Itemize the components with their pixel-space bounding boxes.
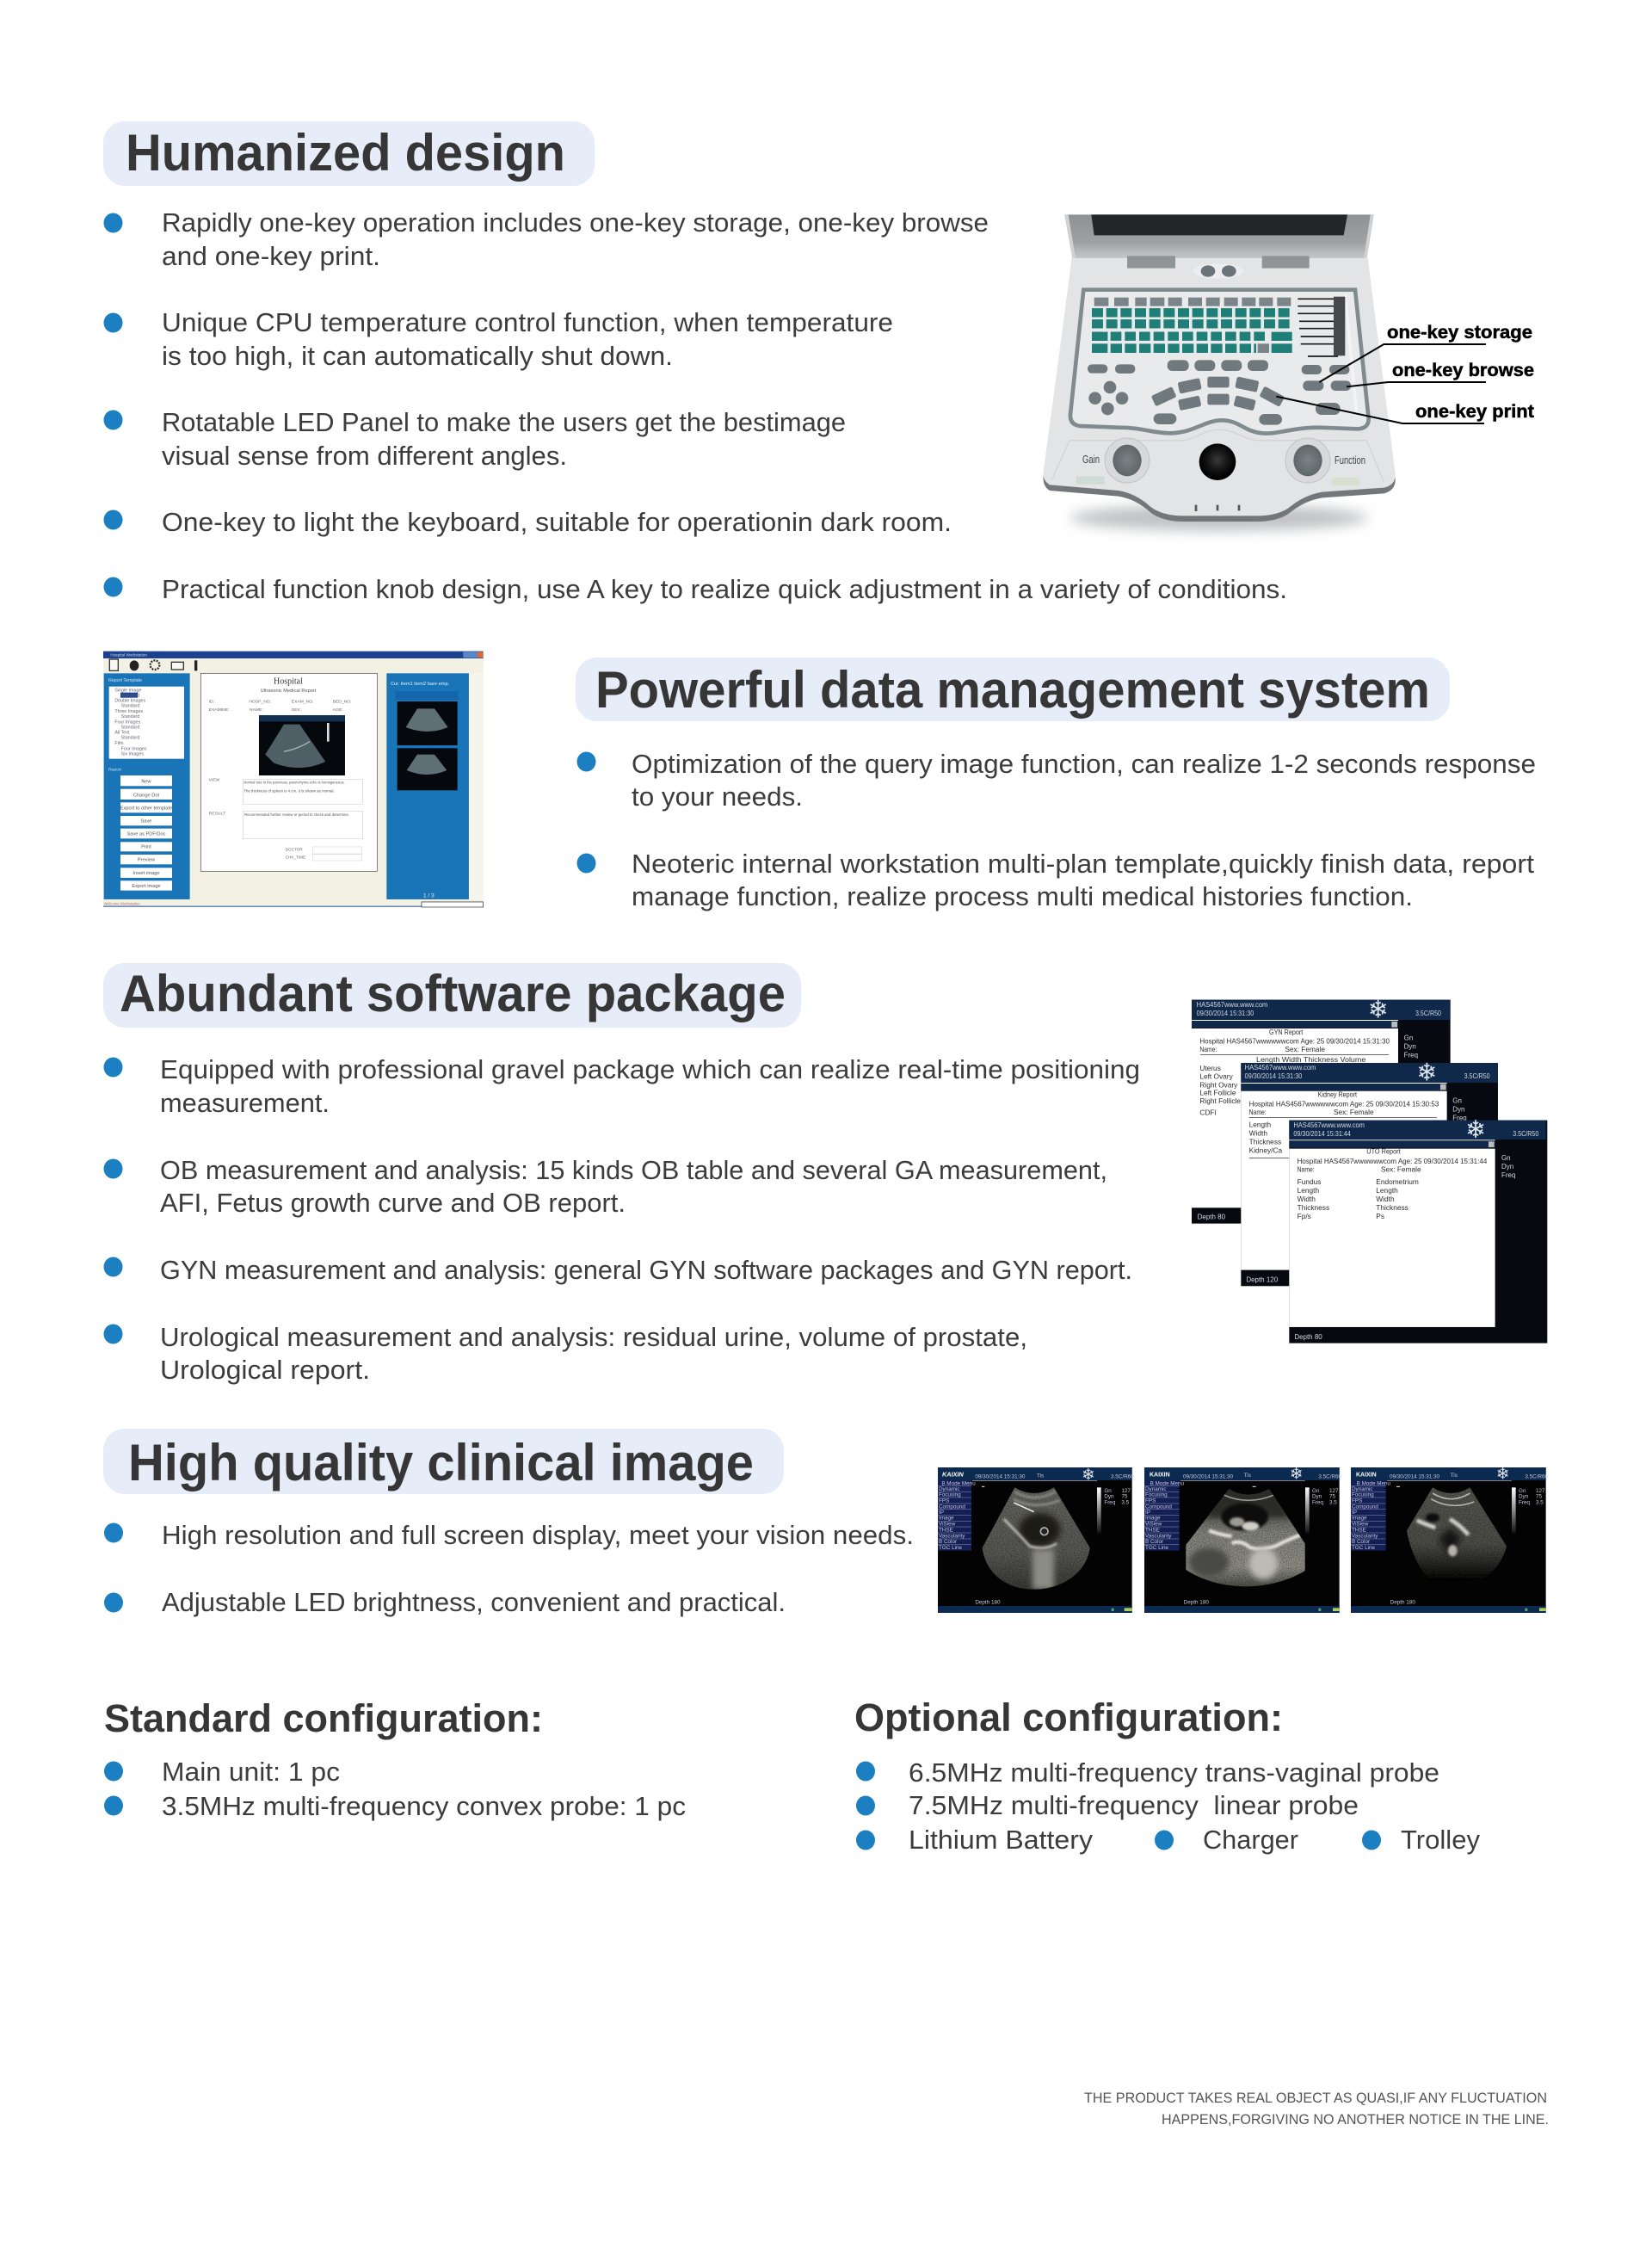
ultrasound image 2: Dynamic <box>1145 1486 1167 1492</box>
screen: GYN report: Name: <box>1199 1045 1217 1053</box>
screen: UTO report <box>1289 1116 1547 1343</box>
ultrasound image 3: ViSiew <box>1352 1522 1369 1528</box>
ultrasound image 3: Dyn <box>1519 1494 1529 1500</box>
software screenshot: report workstation: The thickness of spleen is 4 cm. It is shown as normal. <box>243 789 335 794</box>
software screenshot: report workstation: Ultrasonic Medical Report <box>261 689 317 694</box>
software screenshot: report workstation: Film <box>114 741 124 746</box>
footer disclaimer: HAPPENS,FORGIVING NO ANOTHER NOTICE IN THE LINE. <box>1162 2111 1549 2128</box>
bullet list: software packages: GYN measurement and analysis: general GYN software packages and GYN report. <box>160 1255 1132 1285</box>
software screenshot: report workstation: Hospital Workstation <box>110 652 147 657</box>
footer disclaimer <box>1084 2090 1549 2128</box>
ultrasound image 2: 09/30/2014 15:31:30 <box>1183 1473 1234 1479</box>
software screenshot: report workstation: Four Images <box>121 746 147 751</box>
ultrasound image 2: B Color <box>1145 1539 1163 1545</box>
ultrasound image 2: 3.5 <box>1329 1499 1337 1505</box>
section: Abundant software package <box>103 963 1547 1385</box>
ultrasound image 1: Image <box>939 1516 954 1522</box>
screen: GYN report: Left Follicle <box>1199 1089 1236 1097</box>
ultrasound image 3: IP <box>1352 1510 1357 1516</box>
ultrasound image 2: IP <box>1145 1510 1150 1516</box>
ultrasound image 1: Dyn <box>1104 1494 1114 1500</box>
ultrasound image 1: THSE <box>939 1527 953 1533</box>
software screenshot: report workstation: Standard <box>121 736 139 741</box>
screen: kidney report: Width <box>1249 1128 1267 1137</box>
ultrasound image 2: Vascularity <box>1145 1533 1172 1539</box>
bullet list: data management features: to your needs. <box>632 781 803 812</box>
software screenshot: report workstation: EXAMINE: <box>209 707 229 713</box>
screen: UTO report: Dyn <box>1501 1163 1513 1170</box>
software screenshot: report workstation: Save as PDF/Doc <box>127 832 166 837</box>
software screenshot: report workstation: ID: <box>209 700 214 705</box>
bullet list: humanized features: Practical function knob design, use A key to realize quick adjustment in a variety of conditions. <box>162 574 1287 604</box>
software screenshot: report workstation: NAME: <box>250 707 263 713</box>
bullet list: standard items: Main unit: 1 pc <box>162 1757 340 1787</box>
screen: kidney report: Dyn <box>1452 1105 1465 1113</box>
ultrasound image 3: 3.5 <box>1536 1499 1544 1505</box>
screen: GYN report: Depth 80 <box>1198 1214 1226 1221</box>
callout: one-key print: one-key print <box>1415 402 1534 422</box>
ultrasound image 2: Gn <box>1312 1488 1320 1494</box>
screen: UTO report: Thickness <box>1376 1203 1409 1212</box>
bullet list: image features: High resolution and full screen display, meet your vision needs. <box>162 1520 914 1550</box>
section: Standard configuration <box>104 1696 686 1821</box>
ultrasound image 2: 3.5C/R60 <box>1318 1473 1342 1479</box>
bullet list: humanized features: visual sense from different angles. <box>162 441 567 471</box>
software screenshot: report workstation: Export image <box>132 884 161 889</box>
software screenshot: report workstation: Normal size in the pancreas, parenchyma echo is homogeneous. <box>243 781 345 786</box>
ultrasound image 3: TGC Line <box>1352 1545 1376 1551</box>
screen: UTO report: Endometrium <box>1376 1177 1419 1186</box>
bullet list: optional items: 6.5MHz multi-frequency trans-vaginal probe <box>909 1757 1439 1788</box>
screen: UTO report: Depth 80 <box>1294 1333 1322 1341</box>
screen: kidney report: Gn <box>1452 1096 1462 1104</box>
stacked report screens <box>1192 996 1547 1343</box>
screen: GYN report: GYN Report <box>1269 1028 1304 1036</box>
ultrasound image 1: TGC Line <box>939 1545 963 1551</box>
screen: kidney report: 3.5C/R50 <box>1464 1072 1490 1080</box>
screen: GYN report: Right Ovary <box>1199 1080 1238 1089</box>
ultrasound image 1: B Color <box>939 1539 957 1545</box>
screen: UTO report: 09/30/2014 15:31:44 <box>1293 1130 1351 1138</box>
ultrasound image 2: ViSiew <box>1145 1522 1162 1528</box>
heading pill: Humanized design: Humanized design <box>126 124 565 182</box>
software screenshot: report workstation: Save <box>141 819 151 825</box>
screen: GYN report: Sex: Female <box>1285 1045 1325 1053</box>
software screenshot: report workstation: VIEW <box>209 777 220 782</box>
screen: UTO report: Thickness <box>1298 1203 1329 1212</box>
bullet list: software packages: measurement. <box>160 1088 330 1118</box>
screen: kidney report <box>1241 1059 1498 1286</box>
bullet list: humanized features: and one-key print. <box>162 241 380 271</box>
ultrasound image 1: KAIXIN <box>942 1471 965 1479</box>
ultrasound image 3: THSE <box>1352 1527 1366 1533</box>
heading pill: Powerful data management system: Powerful data management system <box>595 661 1430 719</box>
ultrasound image 2: Freq <box>1312 1499 1323 1505</box>
screen: UTO report: Ps <box>1376 1212 1384 1220</box>
screen: GYN report: Length Width Thickness Volume <box>1256 1055 1366 1064</box>
screen: GYN report: Dyn <box>1404 1042 1416 1050</box>
bullet list: humanized features <box>103 207 1287 604</box>
ultrasound image 3: Compound <box>1352 1504 1378 1510</box>
screen: GYN report: 09/30/2014 15:31:30 <box>1197 1010 1254 1017</box>
ultrasound image 3: Freq <box>1519 1499 1530 1505</box>
software screenshot: report workstation: Report <box>108 767 122 772</box>
screen: UTO report: Freq <box>1501 1171 1515 1179</box>
screen: GYN report: Right Follicle <box>1199 1096 1241 1105</box>
ultrasound image 2: THSE <box>1145 1527 1160 1533</box>
ultrasound image 1: B Mode Menu <box>941 1480 976 1486</box>
software screenshot: report workstation: EXAM_NO: <box>292 700 313 705</box>
ultrasound image 1: Tis <box>1037 1473 1044 1479</box>
screen: kidney report: Kidney/Ca <box>1249 1146 1282 1154</box>
screen: UTO report: Sex: Female <box>1381 1165 1421 1174</box>
heading pill: Abundant software package: Abundant software package <box>120 965 786 1022</box>
ultrasound image 3: Dynamic <box>1352 1486 1373 1492</box>
screen: GYN report: Uterus <box>1199 1064 1221 1072</box>
ultrasound image 3: 127 <box>1536 1488 1545 1494</box>
screen: GYN report: HAS4567www.www.com <box>1197 1001 1268 1009</box>
bullet list: image features: Adjustable LED brightness, convenient and practical. <box>162 1587 786 1617</box>
software screenshot: report workstation: Change Dot <box>133 793 160 798</box>
software screenshot: report workstation: All Text <box>114 730 130 735</box>
screen: UTO report: Fundus <box>1298 1177 1321 1186</box>
screen: UTO report: UTO Report <box>1366 1147 1401 1156</box>
ultrasound image 1: Depth 180 <box>975 1600 1001 1606</box>
ultrasound image 1: Compound <box>939 1504 965 1510</box>
ultrasound image 3: 3.5C/R60 <box>1525 1473 1549 1479</box>
ultrasound image 3: ❄ <box>1496 1465 1509 1483</box>
ultrasound image 1: IP <box>939 1510 944 1516</box>
ultrasound image 1: Freq <box>1104 1499 1116 1505</box>
ultrasound image 2: Image <box>1145 1516 1161 1522</box>
screen: UTO report: HAS4567www.www.com <box>1293 1121 1365 1129</box>
heading: Optional configuration: Optional configuration: <box>854 1695 1283 1739</box>
software screenshot: report workstation: Cur. item1 item2 bare emp. <box>391 682 450 687</box>
bullet list: humanized features: One-key to light the keyboard, suitable for operationin dark room. <box>162 507 952 537</box>
ultrasound image 3: Tis <box>1451 1473 1458 1479</box>
software screenshot: report workstation: Standard <box>121 693 139 698</box>
bullet list: software packages: OB measurement and analysis: 15 kinds OB table and several GA measurement, <box>160 1155 1107 1185</box>
ultrasound image 2: FPS <box>1145 1498 1156 1504</box>
bullet list: humanized features: Rotatable LED Panel to make the users get the bestimage <box>162 407 846 437</box>
bullet list: optional items: Charger <box>1203 1825 1298 1855</box>
screen: UTO report: Fp/s <box>1298 1212 1311 1220</box>
software screenshot: report workstation: Print <box>141 845 151 850</box>
knob label: Gain: Gain <box>1082 453 1100 466</box>
bullet list: humanized features: is too high, it can automatically shut down. <box>162 341 673 371</box>
ultrasound image 1: 3.5C/R60 <box>1111 1473 1134 1479</box>
bullet list: optional items: 7.5MHz multi-frequency linear probe <box>909 1790 1359 1820</box>
screen: UTO report: Hospital HAS4567wwwwwwcom Age: 25 09/30/2014 15:31:44 <box>1298 1157 1488 1165</box>
ultrasound image 1: 09/30/2014 15:31:30 <box>975 1473 1026 1479</box>
ultrasound image 2: B Mode Menu <box>1150 1480 1185 1486</box>
bullet list: optional items <box>856 1757 1480 1855</box>
ultrasound image 3: B Color <box>1352 1539 1370 1545</box>
section: High quality clinical image <box>103 1429 1549 1617</box>
software screenshot: report workstation: HOSP_NO: <box>249 700 271 705</box>
software screenshot: report workstation: RESULT <box>209 812 225 817</box>
ultrasound console <box>1044 214 1486 531</box>
screen: UTO report: ❄ <box>1465 1116 1486 1144</box>
screen: GYN report <box>1192 996 1451 1224</box>
ultrasound image 1 <box>938 1465 1134 1613</box>
ultrasound image 3: Vascularity <box>1352 1533 1378 1539</box>
ultrasound image 3: Depth 180 <box>1390 1600 1415 1606</box>
bullet list: data management features: Neoteric internal workstation multi-plan template,quickly finish data, report <box>632 849 1534 879</box>
ultrasound image 3: KAIXIN <box>1356 1473 1377 1479</box>
screen: UTO report: Width <box>1298 1195 1316 1203</box>
ultrasound image 1: ViSiew <box>939 1522 956 1528</box>
bullet list: humanized features: Unique CPU temperature control function, when temperature <box>162 307 893 337</box>
ultrasound image 2: Focusing <box>1145 1492 1168 1498</box>
software screenshot: report workstation: Standard <box>121 725 139 730</box>
software screenshot: report workstation: BED_NO: <box>333 700 352 705</box>
software screenshot: report workstation: SEX: <box>292 707 301 713</box>
screen: kidney report: 09/30/2014 15:31:30 <box>1245 1072 1303 1080</box>
screen: kidney report: ❄ <box>1416 1059 1437 1086</box>
software screenshot: report workstation: New <box>141 780 152 785</box>
software screenshot: report workstation: CHK_TIME <box>286 855 305 859</box>
software screenshot: report workstation: Four Images <box>114 720 141 725</box>
ultrasound image 1: 75 <box>1121 1494 1128 1500</box>
software screenshot: report workstation: DOCTOR <box>286 848 303 852</box>
screen: UTO report: Length <box>1376 1186 1398 1195</box>
software screenshot: report workstation: Insert image <box>133 871 160 876</box>
screen: kidney report: Depth 120 <box>1246 1275 1279 1283</box>
ultrasound image 3: B Mode Menu <box>1357 1480 1391 1486</box>
software screenshot: report workstation <box>103 652 484 907</box>
bullet list: data management features: Optimization of the query image function, can realize 1-2 seconds response <box>632 749 1536 779</box>
footer disclaimer: THE PRODUCT TAKES REAL OBJECT AS QUASI,IF ANY FLUCTUATION <box>1084 2090 1547 2106</box>
ultrasound image 2: ❄ <box>1290 1465 1303 1483</box>
ultrasound image 1: 127 <box>1121 1488 1131 1494</box>
bullet list: software packages <box>103 1054 1140 1385</box>
software screenshot: report workstation: AGE: <box>333 707 343 713</box>
section: Optional configuration <box>854 1695 1480 1855</box>
ultrasound image 2: TGC Line <box>1145 1545 1169 1551</box>
software screenshot: report workstation: Recommended further review or period to check and determine. <box>244 812 349 818</box>
ultrasound image 2: Depth 180 <box>1184 1600 1209 1606</box>
software screenshot: report workstation: Export to other template <box>120 806 172 811</box>
ultrasound image 1: Vascularity <box>939 1533 965 1539</box>
heading: Standard configuration: Standard configuration: <box>104 1696 543 1740</box>
ultrasound image 2: KAIXIN <box>1150 1473 1170 1479</box>
ultrasound image 3: Gn <box>1519 1488 1526 1494</box>
ultrasound image 1: 3.5 <box>1121 1499 1130 1505</box>
ultrasound image 3: Image <box>1352 1516 1367 1522</box>
software screenshot: report workstation: Three Images <box>114 709 144 714</box>
screen: kidney report: Sex: Female <box>1334 1108 1374 1116</box>
ultrasound image 3: Focusing <box>1352 1492 1374 1498</box>
section: Humanized design <box>103 121 1534 604</box>
ultrasound image 2: Tis <box>1244 1473 1251 1479</box>
infographic page <box>103 121 1548 2126</box>
screen: GYN report: Freq <box>1404 1051 1418 1059</box>
ultrasound image 3: 75 <box>1536 1494 1543 1500</box>
software screenshot: report workstation: Single Image <box>114 688 141 693</box>
screen: kidney report: Hospital HAS4567wwwwwwcom Age: 25 09/30/2014 15:30:53 <box>1249 1100 1439 1109</box>
software screenshot: report workstation: Hospital <box>274 677 303 687</box>
bullet list: data management features <box>576 749 1536 911</box>
ultrasound image 1: Dynamic <box>939 1486 960 1492</box>
callout: one-key storage: one-key storage <box>1387 323 1532 343</box>
bullet list: humanized features: Rapidly one-key operation includes one-key storage, one-key browse <box>162 207 989 238</box>
screen: kidney report: Freq <box>1452 1114 1467 1121</box>
bullet list: optional items: Lithium Battery <box>909 1825 1094 1855</box>
ultrasound image 3: 09/30/2014 15:31:30 <box>1390 1473 1440 1479</box>
bullet list: data management features: manage function, realize process multi medical histories function. <box>632 881 1413 911</box>
callout: one-key browse: one-key browse <box>1392 361 1534 380</box>
bullet list: software packages: Urological measurement and analysis: residual urine, volume of prostate, <box>160 1322 1027 1352</box>
software screenshot: report workstation: Double Images <box>114 699 146 704</box>
software screenshot: report workstation: Standard <box>121 703 139 708</box>
ultrasound image 3: FPS <box>1352 1498 1362 1504</box>
bullet list: standard items: 3.5MHz multi-frequency convex probe: 1 pc <box>162 1791 686 1821</box>
bullet list: image features <box>104 1520 914 1617</box>
ultrasound image 1: Gn <box>1104 1488 1112 1494</box>
bullet list: optional items: Trolley <box>1401 1825 1480 1855</box>
knob label: Function: Function <box>1335 454 1365 466</box>
software screenshot: report workstation: Preview <box>138 858 156 863</box>
software screenshot: report workstation: Standard <box>121 714 139 720</box>
screen: UTO report: 3.5C/R50 <box>1513 1130 1539 1138</box>
ultrasound image 2: Dyn <box>1312 1494 1322 1500</box>
ultrasound image 1: ❄ <box>1082 1465 1095 1483</box>
device photo: ultrasound console with one-key callouts <box>1044 214 1534 531</box>
bullet list: software packages: Urological report. <box>160 1355 370 1385</box>
screen: GYN report: Gn <box>1404 1034 1413 1041</box>
software screenshot: report workstation: 1 / 3 <box>423 893 435 899</box>
screen: UTO report: Name: <box>1298 1165 1315 1174</box>
screen: kidney report: Kidney Report <box>1318 1090 1358 1098</box>
ultrasound image 2: 75 <box>1329 1494 1336 1500</box>
bullet list: software packages: Equipped with professional gravel package which can realize real-time positioning <box>160 1054 1140 1084</box>
bullet list: software packages: AFI, Fetus growth curve and OB report. <box>160 1188 626 1218</box>
screen: UTO report: Width <box>1376 1195 1395 1203</box>
ultrasound image 3 <box>1351 1465 1549 1613</box>
screen: GYN report: CDFI <box>1199 1108 1217 1116</box>
screen: kidney report: HAS4567www.www.com <box>1245 1064 1316 1072</box>
ultrasound image 1: FPS <box>939 1498 949 1504</box>
screen: kidney report: Thickness <box>1249 1137 1281 1146</box>
screen: UTO report: Gn <box>1501 1154 1511 1162</box>
ultrasound image 2: Compound <box>1145 1504 1172 1510</box>
software screenshot: report workstation: Welcome Workstation <box>104 901 140 905</box>
screen: UTO report: Length <box>1298 1186 1319 1195</box>
heading pill: High quality clinical image: High quality clinical image <box>128 1434 754 1492</box>
screen: kidney report: Length <box>1249 1120 1271 1128</box>
bullet list: standard items <box>104 1757 686 1821</box>
screen: GYN report: Hospital HAS4567wwwwwwcom Age: 25 09/30/2014 15:31:30 <box>1199 1037 1390 1046</box>
ultrasound image 2 <box>1144 1465 1342 1613</box>
screen: GYN report: Left Ovary <box>1199 1072 1234 1080</box>
ultrasound image 2: 127 <box>1329 1488 1339 1494</box>
section: Powerful data management system <box>103 652 1536 911</box>
screen: GYN report: 3.5C/R50 <box>1415 1010 1441 1017</box>
screen: kidney report: Name: <box>1249 1108 1267 1116</box>
ultrasound image 1: Focusing <box>939 1492 961 1498</box>
software screenshot: report workstation: Report Template <box>108 678 142 683</box>
software screenshot: report workstation: Six Images <box>121 751 144 757</box>
screen: GYN report: ❄ <box>1368 996 1389 1023</box>
